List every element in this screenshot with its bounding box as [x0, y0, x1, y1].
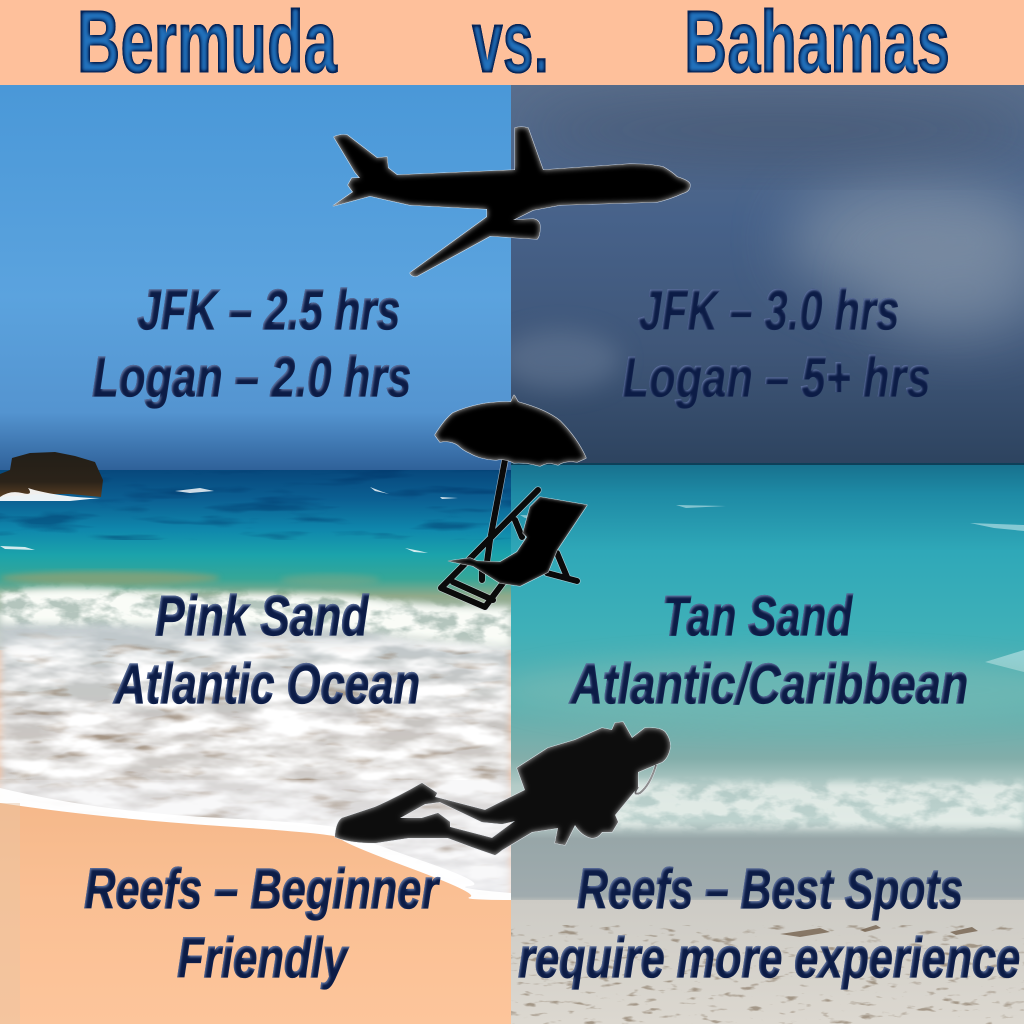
text: Bermuda flight times: Logan – 2.0 hrs: [92, 345, 411, 409]
text: Bermuda sand and ocean: [112, 584, 420, 716]
panel: Bahamas beach photo: [500, 85, 1024, 1024]
header band: [0, 0, 1024, 85]
regulator hose: [635, 765, 656, 794]
text: Bahamas sand and ocean: Tan Sand: [662, 584, 853, 648]
rock in the sea: [0, 452, 103, 501]
text: Bermuda reefs: Reefs – Beginner: [84, 857, 440, 921]
icon: beach umbrella and lounge chair: [435, 395, 587, 607]
text: Bahamas flight times: Logan – 5+ hrs: [622, 345, 930, 409]
text: Bermuda reefs: Friendly: [177, 926, 350, 990]
text: Bermuda sand and ocean: Atlantic Ocean: [112, 652, 420, 716]
text: Bahamas flight times: [622, 278, 930, 409]
icon: scuba diver: [335, 722, 670, 855]
icon: airplane: [333, 127, 690, 276]
panel: Bermuda beach photo: [0, 85, 511, 1024]
text: Bermuda flight times: [92, 278, 411, 409]
umbrella pole and chair frame: [441, 460, 577, 607]
chair seat: [448, 497, 587, 586]
text: Bermuda reefs: [84, 857, 440, 990]
text: Bermuda sand and ocean: Pink Sand: [155, 584, 369, 648]
umbrella canopy: [435, 395, 586, 466]
text: Bahamas reefs: [518, 857, 1020, 990]
text: Bahamas flight times: JFK – 3.0 hrs: [638, 278, 899, 342]
text: Bermuda flight times: JFK – 2.5 hrs: [137, 278, 400, 342]
text: Bahamas sand and ocean: [568, 584, 968, 716]
